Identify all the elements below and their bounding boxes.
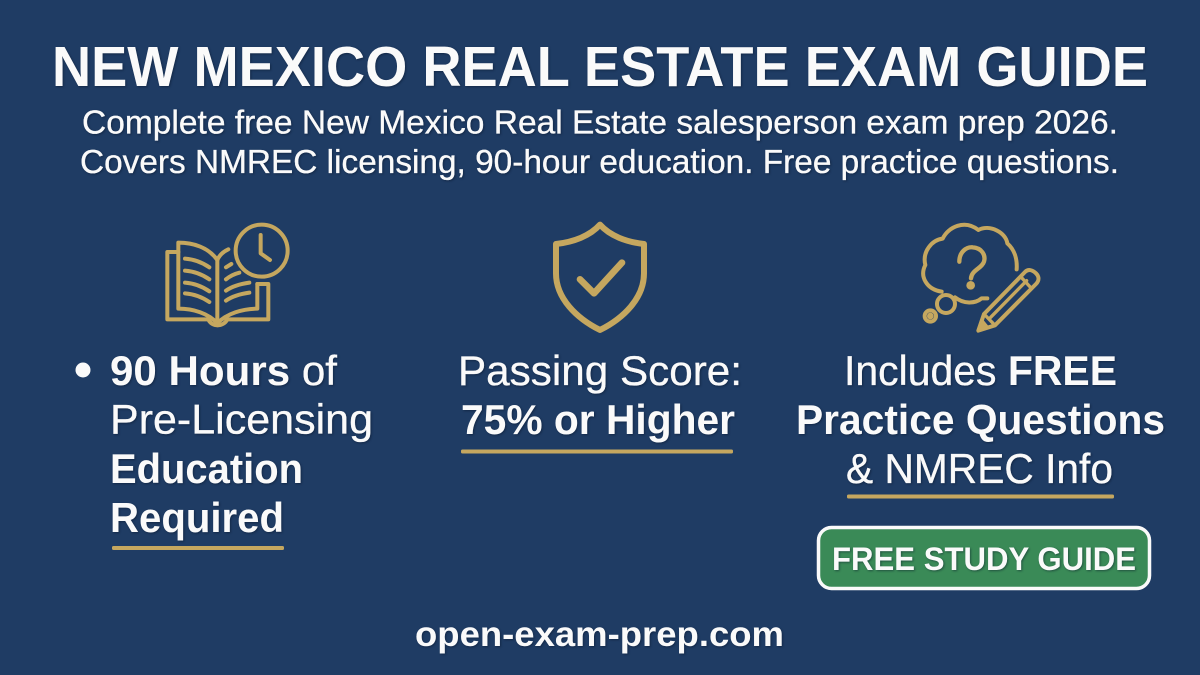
- education text: [110, 347, 373, 541]
- education text: Required: [110, 494, 284, 541]
- title: NEW MEXICO REAL ESTATE EXAM GUIDE: [52, 35, 1148, 99]
- button: free study guide: [818, 528, 1150, 588]
- column: passing score: [458, 347, 742, 443]
- subtitle: [80, 104, 1119, 180]
- footer url: open-exam-prep.com: [415, 615, 784, 654]
- icon: shield with check: [556, 225, 644, 330]
- column: education requirement: [76, 347, 373, 541]
- bullet: [76, 362, 90, 378]
- column: practice questions: [796, 347, 1165, 492]
- column: practice questions: Includes FREE: [844, 347, 1117, 394]
- column: passing score: Passing Score:: [458, 347, 742, 394]
- education text: Pre-Licensing: [110, 396, 373, 442]
- subtitle: Covers NMREC licensing, 90-hour education. Free practice questions.: [80, 143, 1119, 180]
- subtitle: Complete free New Mexico Real Estate salesperson exam prep 2026.: [82, 104, 1118, 140]
- icon: thought bubble with question mark and pencil: [923, 225, 1038, 331]
- column: practice questions: & NMREC Info: [846, 445, 1113, 492]
- column: passing score: 75% or Higher: [461, 396, 735, 443]
- icon: book with clock: [167, 225, 288, 325]
- education text: 90 Hours of: [110, 347, 337, 394]
- button: free study guide: FREE STUDY GUIDE: [832, 541, 1136, 577]
- education text: Education: [110, 445, 303, 492]
- column: practice questions: Practice Questions: [796, 396, 1165, 443]
